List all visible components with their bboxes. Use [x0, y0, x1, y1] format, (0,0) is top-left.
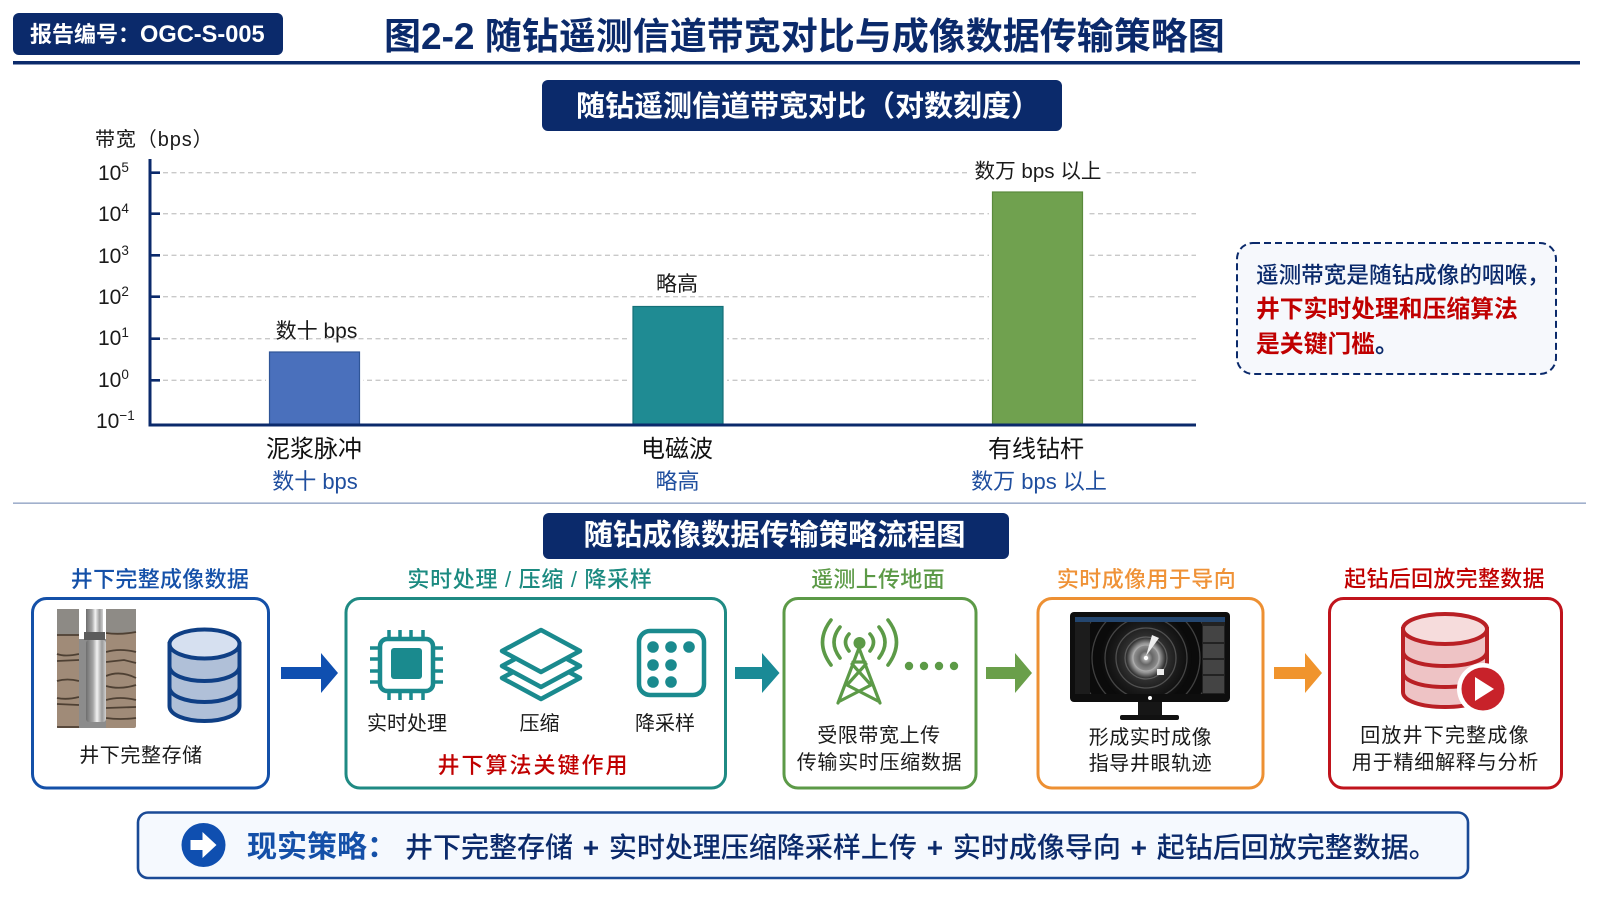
step 2: real-time processing: [346, 567, 726, 788]
arrow: step 3 to 4: [986, 653, 1032, 693]
y axis ticks and labels: 3: [121, 243, 129, 258]
y axis ticks and labels: 4: [121, 201, 129, 216]
icon: full storage database: [170, 630, 240, 721]
title: 图2-2 随钻遥测信道带宽对比与成像数据传输策略图: [384, 16, 1225, 57]
step 4: real-time imaging: [1038, 567, 1263, 788]
callout: bandwidth bottleneck: [1237, 243, 1556, 374]
y axis ticks and labels: 0: [121, 367, 129, 382]
bar: wired drill pipe: [989, 188, 1086, 425]
step 5: replay after tripping: [1330, 566, 1562, 788]
icon: compression layers: [502, 630, 580, 699]
arrow: step 1 to 2: [281, 653, 338, 693]
y axis ticks and labels: 10: [96, 410, 119, 433]
category: wired drill pipe: 数万 bps 以上: [971, 469, 1107, 494]
callout: bandwidth bottleneck: 是关键门槛。: [1256, 331, 1399, 358]
axes: [150, 159, 1196, 425]
step 3: telemetry upload: [784, 567, 976, 788]
step 1: full downhole data: [32, 567, 268, 788]
label: compression: 压缩: [520, 712, 560, 735]
strategy bar: 井下完整存储 + 实时处理压缩降采样上传 + 实时成像导向 + 起钻后回放完整数据。: [405, 832, 1437, 863]
label: full storage: 井下完整存储: [79, 744, 203, 767]
y axis ticks and labels: 10: [98, 245, 121, 268]
y axis ticks and labels: 10: [98, 286, 121, 309]
strategy bar: [138, 812, 1468, 878]
section divider: [13, 502, 1586, 504]
y axis ticks and labels: 10: [98, 327, 121, 350]
y axis ticks and labels: 10: [98, 369, 121, 392]
y axis ticks and labels: −1: [119, 408, 135, 423]
report number badge: 报告编号：OGC-S-005: [30, 22, 265, 48]
value label: electromagnetic: 略高: [656, 273, 698, 296]
step 4 heading: 实时成像用于导向: [1057, 567, 1236, 592]
key role note: 井下算法关键作用: [437, 753, 630, 778]
y axis title: 带宽（bps）: [95, 128, 214, 151]
value label: mud pulse: 数十 bps: [276, 320, 357, 343]
icon: wellbore image: [57, 609, 136, 728]
icon: signal tower: [822, 620, 958, 703]
step 4: real-time imaging: 指导井眼轨迹: [1089, 752, 1212, 775]
category: mud pulse: [266, 436, 362, 494]
label: real-time imaging guidance: 形成实时成像: [1089, 726, 1212, 749]
step 5: replay after tripping: 用于精细解释与分析: [1352, 751, 1539, 774]
heading: bandwidth chart: [542, 80, 1062, 131]
step 1 heading: 井下完整成像数据: [71, 567, 249, 592]
category: electromagnetic: 略高: [655, 469, 700, 494]
category: mud pulse: 数十 bps: [272, 469, 358, 494]
category: wired drill pipe: [971, 436, 1107, 494]
icon: strategy arrow: [182, 823, 226, 867]
icon: replay database: [1403, 614, 1509, 715]
label: downsampling: 降采样: [635, 712, 695, 735]
callout: bandwidth bottleneck: 井下实时处理和压缩算法: [1256, 296, 1518, 323]
category: wired drill pipe: 有线钻杆: [988, 436, 1084, 463]
step 3 heading: 遥测上传地面: [811, 567, 945, 592]
value label: wired drill pipe: 数万 bps 以上: [974, 160, 1102, 183]
y axis ticks and labels: 2: [121, 284, 129, 299]
arrow: step 4 to 5: [1274, 653, 1322, 693]
y axis ticks and labels: [96, 160, 135, 433]
heading: bandwidth chart: 随钻遥测信道带宽对比（对数刻度）: [576, 90, 1040, 123]
y axis ticks and labels: 5: [121, 160, 129, 175]
icon: processor chip: [370, 630, 443, 700]
label: limited bandwidth upload: 受限带宽上传: [817, 724, 941, 747]
heading: flow chart: 随钻成像数据传输策略流程图: [583, 519, 966, 552]
heading: flow chart: [543, 513, 1009, 559]
category: electromagnetic: [641, 436, 713, 494]
step 5 heading: 起钻后回放完整数据: [1344, 566, 1545, 592]
y axis ticks and labels: 10: [98, 203, 121, 226]
arrow: step 2 to 3: [735, 653, 780, 693]
bar: electromagnetic: [629, 303, 727, 424]
strategy text: 现实策略：: [247, 831, 397, 864]
report number badge: [13, 13, 283, 55]
header rule: [13, 61, 1580, 64]
y axis ticks and labels: 1: [121, 325, 129, 340]
callout: bandwidth bottleneck: 遥测带宽是随钻成像的咽喉，: [1256, 263, 1550, 288]
step 3: telemetry upload: 传输实时压缩数据: [797, 751, 962, 774]
step 2 heading: 实时处理 / 压缩 / 降采样: [407, 567, 653, 592]
bar: mud pulse: [266, 349, 363, 425]
label: replay full data: 回放井下完整成像: [1360, 724, 1530, 747]
label: real-time processing: 实时处理: [367, 712, 447, 735]
y axis ticks and labels: 10: [98, 162, 121, 185]
category: electromagnetic: 电磁波: [641, 436, 713, 463]
icon: imaging monitor: [1070, 612, 1230, 720]
category: mud pulse: 泥浆脉冲: [266, 436, 362, 463]
bar chart: telemetry bandwidth: [95, 128, 1196, 494]
icon: downsampling grid: [639, 631, 704, 695]
